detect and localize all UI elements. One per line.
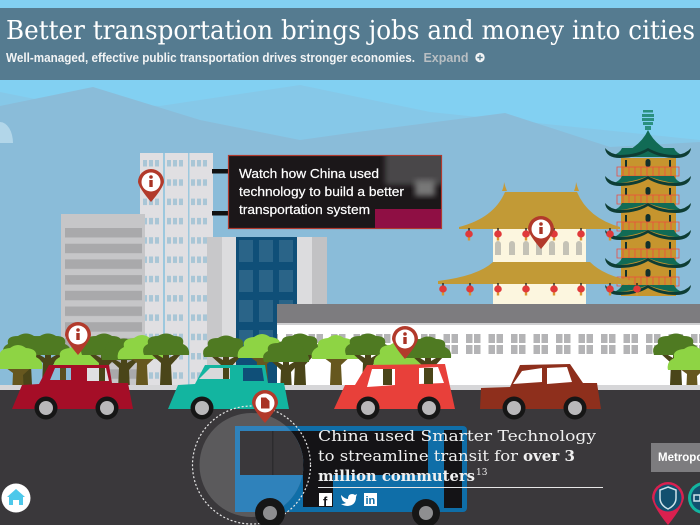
callout divider [318, 487, 603, 488]
mountains [0, 85, 700, 390]
building: grey office block [61, 214, 145, 386]
video callout with connectors: Watch how China used [239, 167, 379, 181]
trees row [0, 334, 700, 385]
car: red [12, 365, 133, 420]
bus callout text: to streamline transit for [318, 447, 519, 465]
home button [2, 484, 30, 512]
car: teal [168, 365, 289, 420]
map pin: white building info [392, 326, 418, 359]
video callout with connectors: technology to build a better [239, 185, 404, 199]
car: coral [334, 364, 455, 420]
pin: teal [688, 482, 700, 514]
social icons: f [323, 494, 328, 509]
bus callout text: 13 [476, 468, 488, 478]
sun arc [0, 122, 13, 143]
subtitle with expand control: Well-managed, effective public transportation drives stronger economies. [6, 51, 415, 65]
bus callout text: China used Smarter Technology [318, 427, 597, 445]
map pin: document [252, 390, 278, 423]
low white building [277, 304, 700, 386]
building: tall white tower [140, 153, 213, 386]
pin: shield [652, 482, 684, 525]
pagoda [605, 110, 691, 296]
map pin: tower info [138, 169, 164, 202]
sidewalk and road [0, 385, 700, 525]
bus callout text [318, 427, 597, 485]
map pin: trees info [65, 322, 91, 355]
bus wheels [255, 498, 440, 525]
bus [235, 426, 467, 512]
map pin: temple info [528, 216, 554, 249]
temple [438, 182, 641, 305]
social icons: in [366, 495, 376, 507]
social icons [319, 493, 377, 509]
bus callout text: over 3 [523, 447, 575, 465]
car: brown [480, 364, 601, 420]
subtitle with expand control: Expand [424, 51, 468, 65]
header banner [0, 8, 700, 80]
video callout with connectors: transportation system [239, 203, 370, 217]
metropolitan label [651, 443, 700, 472]
video callout with connectors [212, 150, 445, 231]
bus callout text: million commuters [318, 467, 475, 485]
highlight circle lens [192, 405, 312, 525]
building: blue core tower [207, 237, 327, 386]
